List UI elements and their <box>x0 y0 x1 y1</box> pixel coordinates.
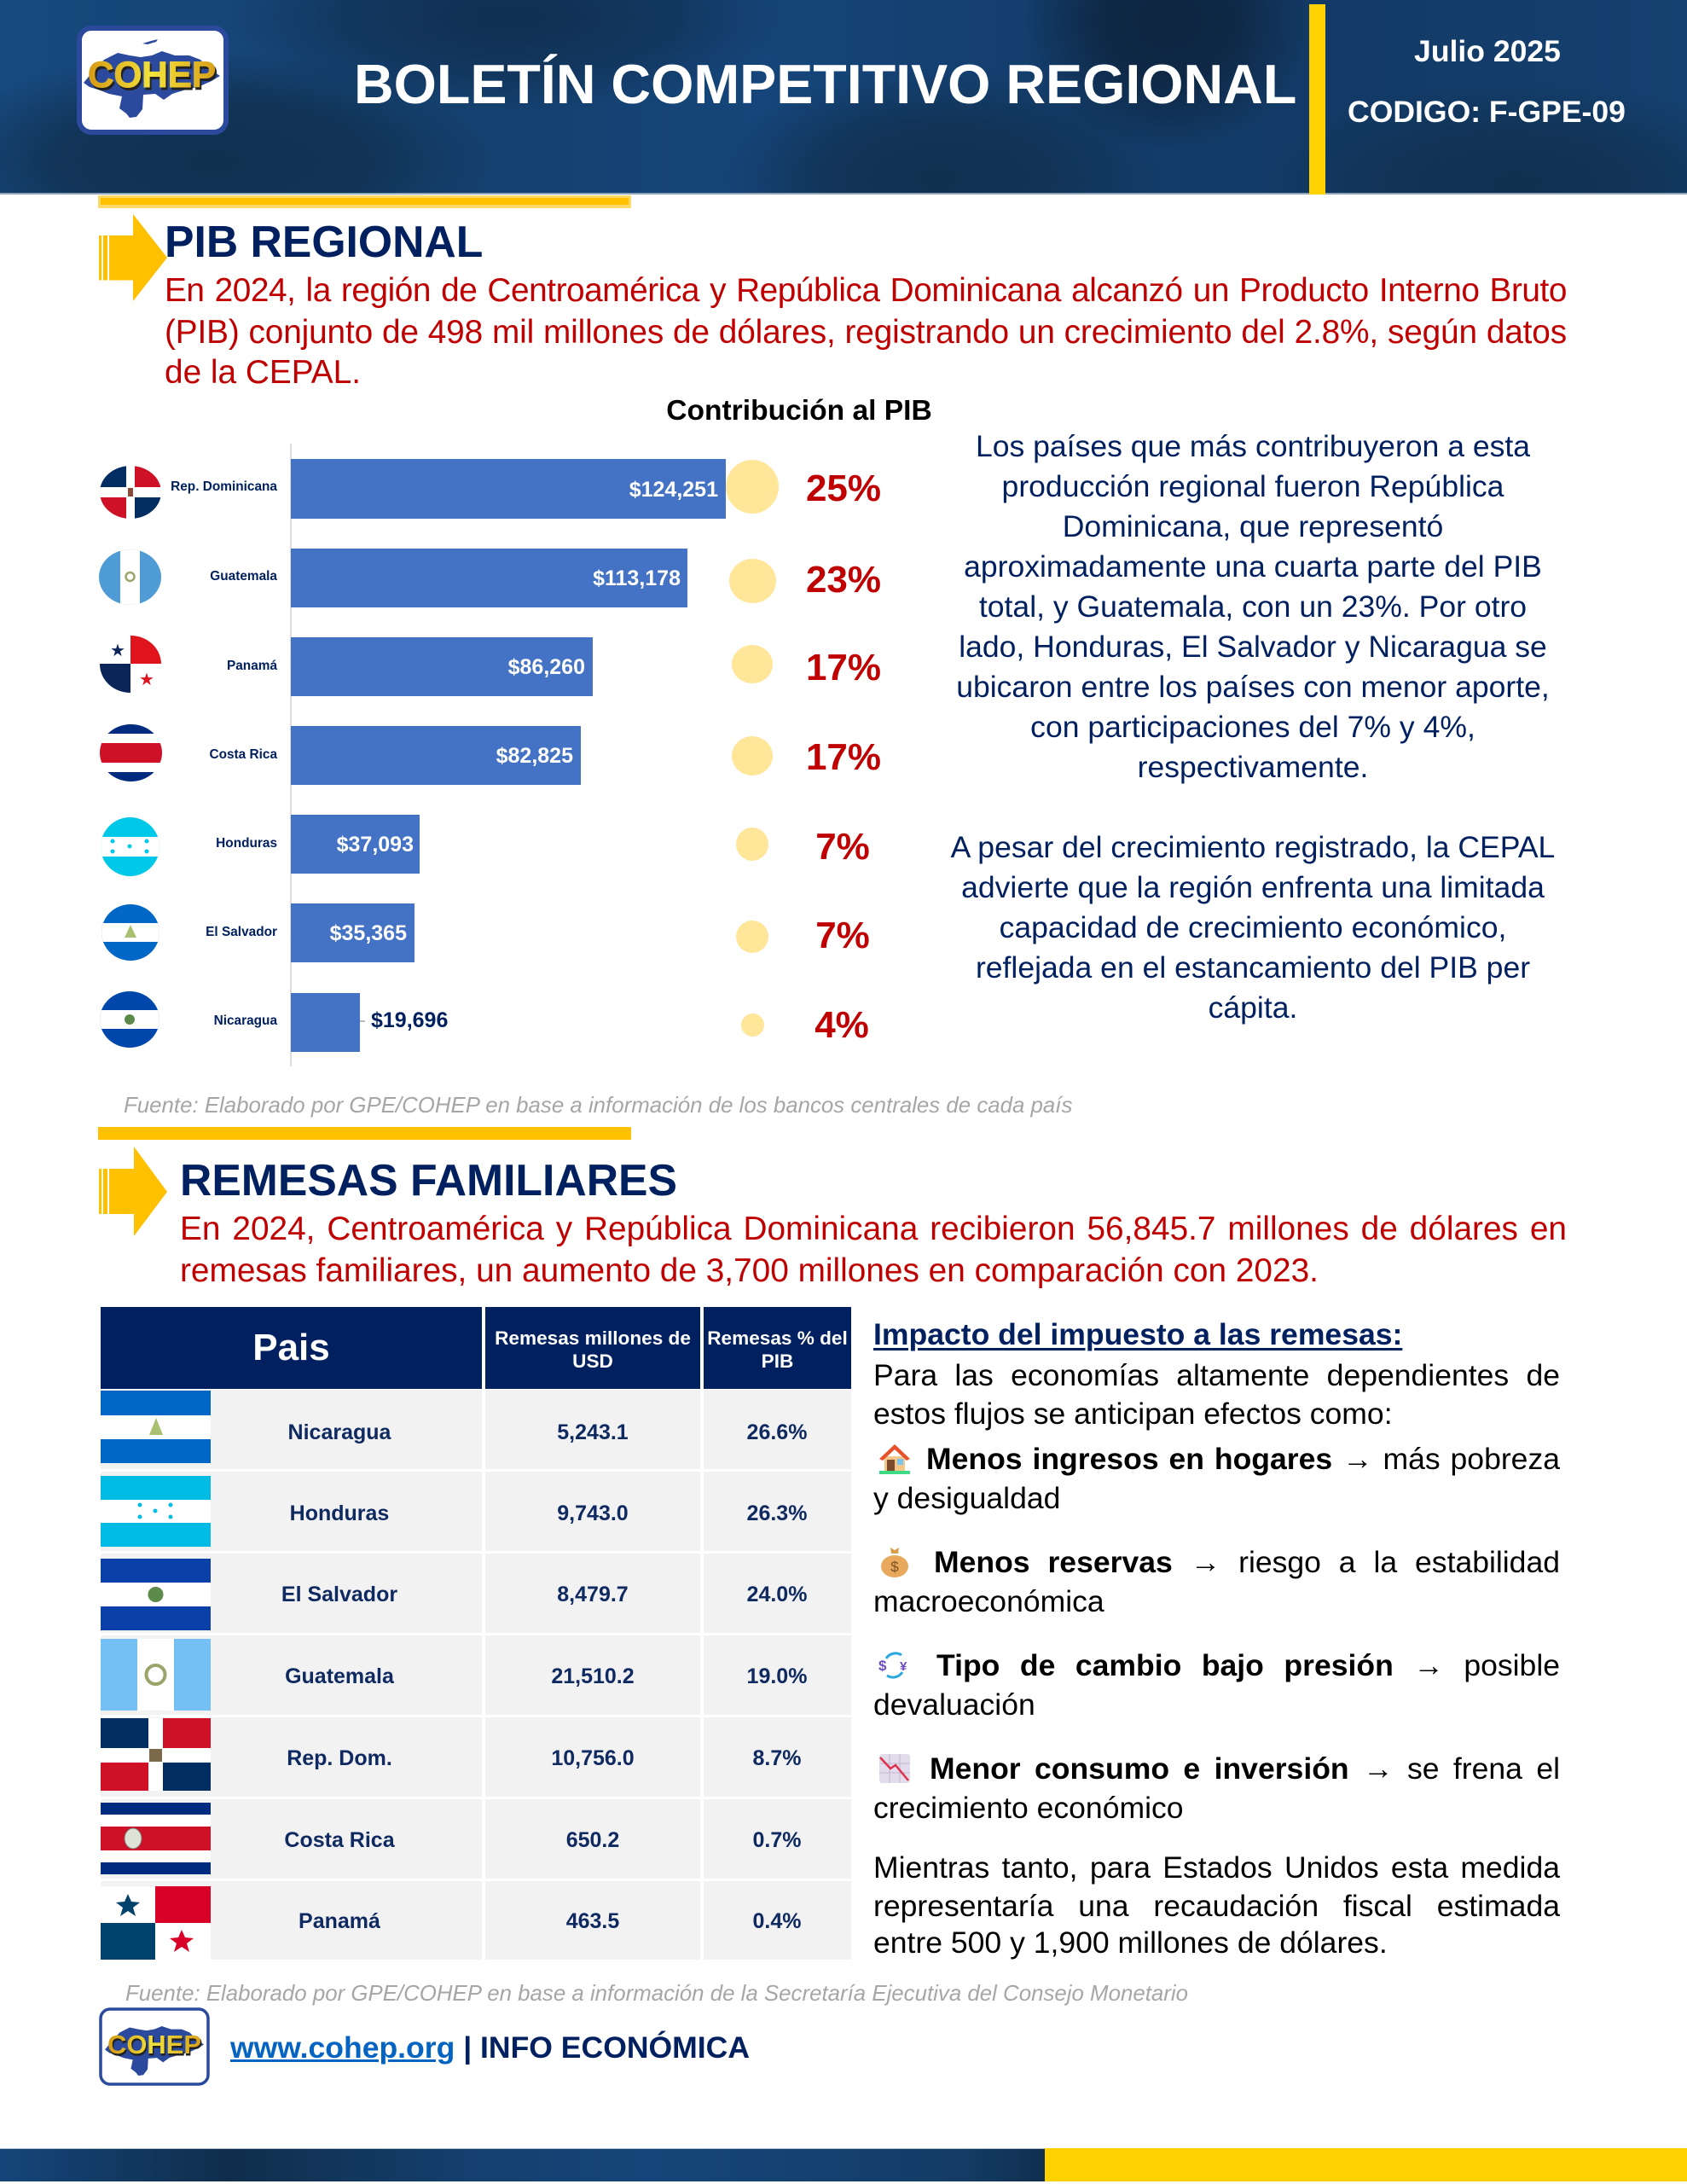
table row: Guatemala: Guatemala <box>285 1664 394 1688</box>
row: Panamá: ★ <box>139 669 154 689</box>
closing text: Mientras tanto, para Estados Unidos esta medida <box>873 1850 1560 1885</box>
row: Costa Rica: 17% <box>806 736 881 778</box>
title: BOLETÍN COMPETITIVO REGIONAL <box>354 54 1296 115</box>
row: República Dominicana: Rep. Dominicana <box>171 479 277 494</box>
analysis text PIB: reflejada en el estancamiento del PIB per <box>976 950 1530 985</box>
row: Honduras: 7% <box>815 826 870 868</box>
table row: Panamá: Panamá <box>299 1909 380 1933</box>
impact heading: Impacto del impuesto a las remesas: <box>873 1317 1402 1351</box>
icon: money bag: $ <box>890 1559 899 1575</box>
table row: Costa Rica: 650.2 <box>566 1828 619 1852</box>
row: Costa Rica: $82,825 <box>496 744 573 768</box>
analysis text PIB: aproximadamente una cuarta parte del PIB <box>964 549 1542 584</box>
analysis text PIB: ubicaron entre los países con menor aporte, <box>956 670 1550 704</box>
footer bar blue <box>0 2148 1045 2181</box>
heading: remesas familiares: REMESAS FAMILIARES <box>180 1155 677 1205</box>
row: Panamá: $86,260 <box>508 655 585 679</box>
row: Costa Rica <box>100 724 881 785</box>
analysis text PIB: respectivamente. <box>1138 750 1368 784</box>
date: Julio 2025 <box>1414 34 1561 68</box>
icon: currency exchange <box>878 1652 907 1679</box>
intro text PIB: (PIB) conjunto de 498 mil millones de dólares, registrando un crecimiento del 2.8%, según datos <box>165 314 1567 351</box>
row: Honduras: Honduras <box>216 836 277 851</box>
icon: currency exchange: ¥ <box>900 1659 907 1674</box>
icon: currency exchange: $ <box>878 1658 887 1674</box>
impact intro <box>873 1358 1560 1431</box>
section rule 2 <box>98 1127 631 1140</box>
table header: Pais <box>252 1327 330 1368</box>
icon: house <box>879 1444 910 1474</box>
row: El Salvador: El Salvador <box>206 925 277 939</box>
logo: footer COHEP: COHEP <box>107 2030 201 2059</box>
table row: El Salvador <box>101 1554 851 1633</box>
intro text PIB: de la CEPAL. <box>165 354 361 391</box>
logo: footer COHEP: COHEP <box>108 2031 202 2061</box>
table row: Costa Rica: Costa Rica <box>284 1828 395 1852</box>
header accent bar <box>1309 4 1325 195</box>
icon: arrow PIB <box>99 214 167 301</box>
source note PIB: Fuente: Elaborado por GPE/COHEP en base a información de los bancos centrales de cada país <box>124 1094 1072 1118</box>
table row: Rep. Dom.: 8.7% <box>752 1746 801 1770</box>
logo: COHEP: COHEP <box>88 55 216 96</box>
row: El Salvador: $35,365 <box>330 921 407 945</box>
table row: Honduras: Honduras <box>290 1502 389 1525</box>
table row: Guatemala: 21,510.2 <box>551 1664 635 1688</box>
document code: CODIGO: F-GPE-09 <box>1348 95 1626 129</box>
table row: Honduras: 26.3% <box>747 1502 807 1525</box>
analysis text PIB: con participaciones del 7% y 4%, <box>1030 710 1475 744</box>
analysis text PIB: Los países que más contribuyeron a esta <box>976 429 1530 463</box>
effect: ingresos: Menos ingresos en hogares → más pobreza <box>926 1442 1560 1476</box>
table row: Rep. Dom.: 10,756.0 <box>551 1746 635 1770</box>
logo: footer COHEP <box>99 2007 210 2086</box>
table header: Remesas % del <box>707 1327 848 1349</box>
table row: Honduras: 9,743.0 <box>557 1502 629 1525</box>
analysis text PIB: total, y Guatemala, con un 23%. Por otro <box>979 590 1527 624</box>
footer link text: www.cohep.org | INFO ECONÓMICA <box>230 2030 750 2065</box>
row: Costa Rica: Costa Rica <box>209 747 277 762</box>
table row: Costa Rica <box>101 1799 851 1879</box>
table header: PIB <box>762 1350 793 1372</box>
icon: arrow remesas <box>99 1147 167 1236</box>
table header: USD <box>572 1350 613 1372</box>
table row: El Salvador: El Salvador <box>281 1583 397 1606</box>
table row: Honduras <box>101 1472 851 1551</box>
row: Guatemala: 23% <box>806 559 881 601</box>
closing text: representaría una recaudación fiscal estimada <box>873 1889 1560 1923</box>
analysis text PIB: Dominicana, que representó <box>1063 509 1443 543</box>
icon: falling chart <box>879 1754 910 1783</box>
row: Guatemala: Guatemala <box>210 569 277 584</box>
effect continuation: reservas: macroeconómica <box>873 1584 1104 1618</box>
intro text remesas <box>180 1211 1567 1289</box>
table header: Remesas millones de <box>495 1327 691 1349</box>
table row: Guatemala: 19.0% <box>747 1664 807 1688</box>
logo: COHEP <box>77 26 229 135</box>
table row: Rep. Dom. <box>101 1717 851 1797</box>
row: Panamá: Panamá <box>227 659 277 673</box>
row: El Salvador <box>101 903 870 962</box>
row: El Salvador: 7% <box>815 915 870 956</box>
table row: Nicaragua: 5,243.1 <box>557 1420 629 1444</box>
table row: Rep. Dom.: Rep. Dom. <box>287 1746 392 1770</box>
impact intro: Para las economías altamente dependientes de <box>873 1358 1560 1392</box>
row: República Dominicana <box>101 459 881 519</box>
source note remesas: Fuente: Elaborado por GPE/COHEP en base a información de la Secretaría Ejecutiva del Consejo Monetario <box>125 1982 1188 2006</box>
table row: Nicaragua: 26.6% <box>747 1420 807 1444</box>
table row: Costa Rica: 0.7% <box>752 1828 801 1852</box>
row: Nicaragua: 4% <box>815 1004 869 1046</box>
header band <box>0 0 1687 195</box>
table: remesas por país <box>101 1307 851 1960</box>
intro text PIB: En 2024, la región de Centroamérica y República Dominicana alcanzó un Producto Interno Bruto <box>165 272 1567 309</box>
row: Guatemala: $113,178 <box>593 566 681 590</box>
row: Honduras <box>101 815 870 876</box>
analysis text PIB: producción regional fueron República <box>1002 469 1504 503</box>
effect continuation: tipo de cambio: devaluación <box>873 1687 1035 1722</box>
table row: Nicaragua: Nicaragua <box>288 1420 391 1444</box>
intro text remesas: remesas familiares, un aumento de 3,700 millones en comparación con 2023. <box>180 1252 1319 1289</box>
effect: consumo: Menor consumo e inversión → se frena el <box>930 1751 1560 1786</box>
analysis text PIB <box>950 429 1555 1025</box>
effect: tipo de cambio: Tipo de cambio bajo presión → posible <box>936 1648 1560 1682</box>
intro text PIB <box>165 272 1567 391</box>
impact intro: estos flujos se anticipan efectos como: <box>873 1397 1393 1431</box>
analysis text PIB: advierte que la región enfrenta una limitada <box>961 870 1545 904</box>
table row: Panamá <box>101 1881 851 1960</box>
row: Nicaragua <box>100 991 869 1052</box>
footer bar yellow <box>1045 2148 1687 2181</box>
row: Panamá: ★ <box>110 640 125 660</box>
row: República Dominicana: 25% <box>806 468 881 509</box>
table row: El Salvador: 24.0% <box>747 1583 807 1606</box>
table row: El Salvador: 8,479.7 <box>557 1583 629 1606</box>
row: República Dominicana: $124,251 <box>629 478 718 502</box>
row: Panamá <box>100 636 881 696</box>
intro text remesas: En 2024, Centroamérica y República Dominicana recibieron 56,845.7 millones de dólares en <box>180 1211 1567 1247</box>
closing text: entre 500 y 1,900 millones de dólares. <box>873 1926 1388 1960</box>
section rule 1 <box>98 195 631 208</box>
icon: money bag <box>881 1548 908 1577</box>
row: Guatemala <box>99 549 881 607</box>
table row: Nicaragua <box>101 1390 851 1469</box>
heading: PIB regional: PIB REGIONAL <box>165 217 483 266</box>
closing text <box>873 1850 1560 1960</box>
table row: Panamá: 0.4% <box>752 1909 801 1933</box>
row: Nicaragua: $19,696 <box>371 1008 448 1032</box>
analysis text PIB: lado, Honduras, El Salvador y Nicaragua se <box>959 630 1547 664</box>
table header <box>101 1307 851 1389</box>
logo: COHEP: COHEP <box>90 57 217 98</box>
analysis text PIB: A pesar del crecimiento registrado, la CEPAL <box>951 830 1555 864</box>
effect continuation: consumo: crecimiento económico <box>873 1791 1184 1825</box>
effect: reservas: Menos reservas → riesgo a la estabilidad <box>934 1545 1560 1579</box>
row: Honduras: $37,093 <box>337 833 414 857</box>
impact text block <box>873 1317 1560 1960</box>
analysis text PIB: capacidad de crecimiento económico, <box>1000 910 1506 944</box>
table row: Guatemala <box>101 1635 851 1715</box>
table row: Panamá: 463.5 <box>566 1909 619 1933</box>
analysis text PIB: cápita. <box>1209 990 1297 1025</box>
bar chart: contribución al PIB <box>99 444 881 1066</box>
row: Nicaragua: Nicaragua <box>214 1014 277 1028</box>
effect continuation: ingresos: y desigualdad <box>873 1481 1060 1515</box>
chart title: Contribución al PIB <box>666 395 932 427</box>
row: Panamá: 17% <box>806 647 881 688</box>
